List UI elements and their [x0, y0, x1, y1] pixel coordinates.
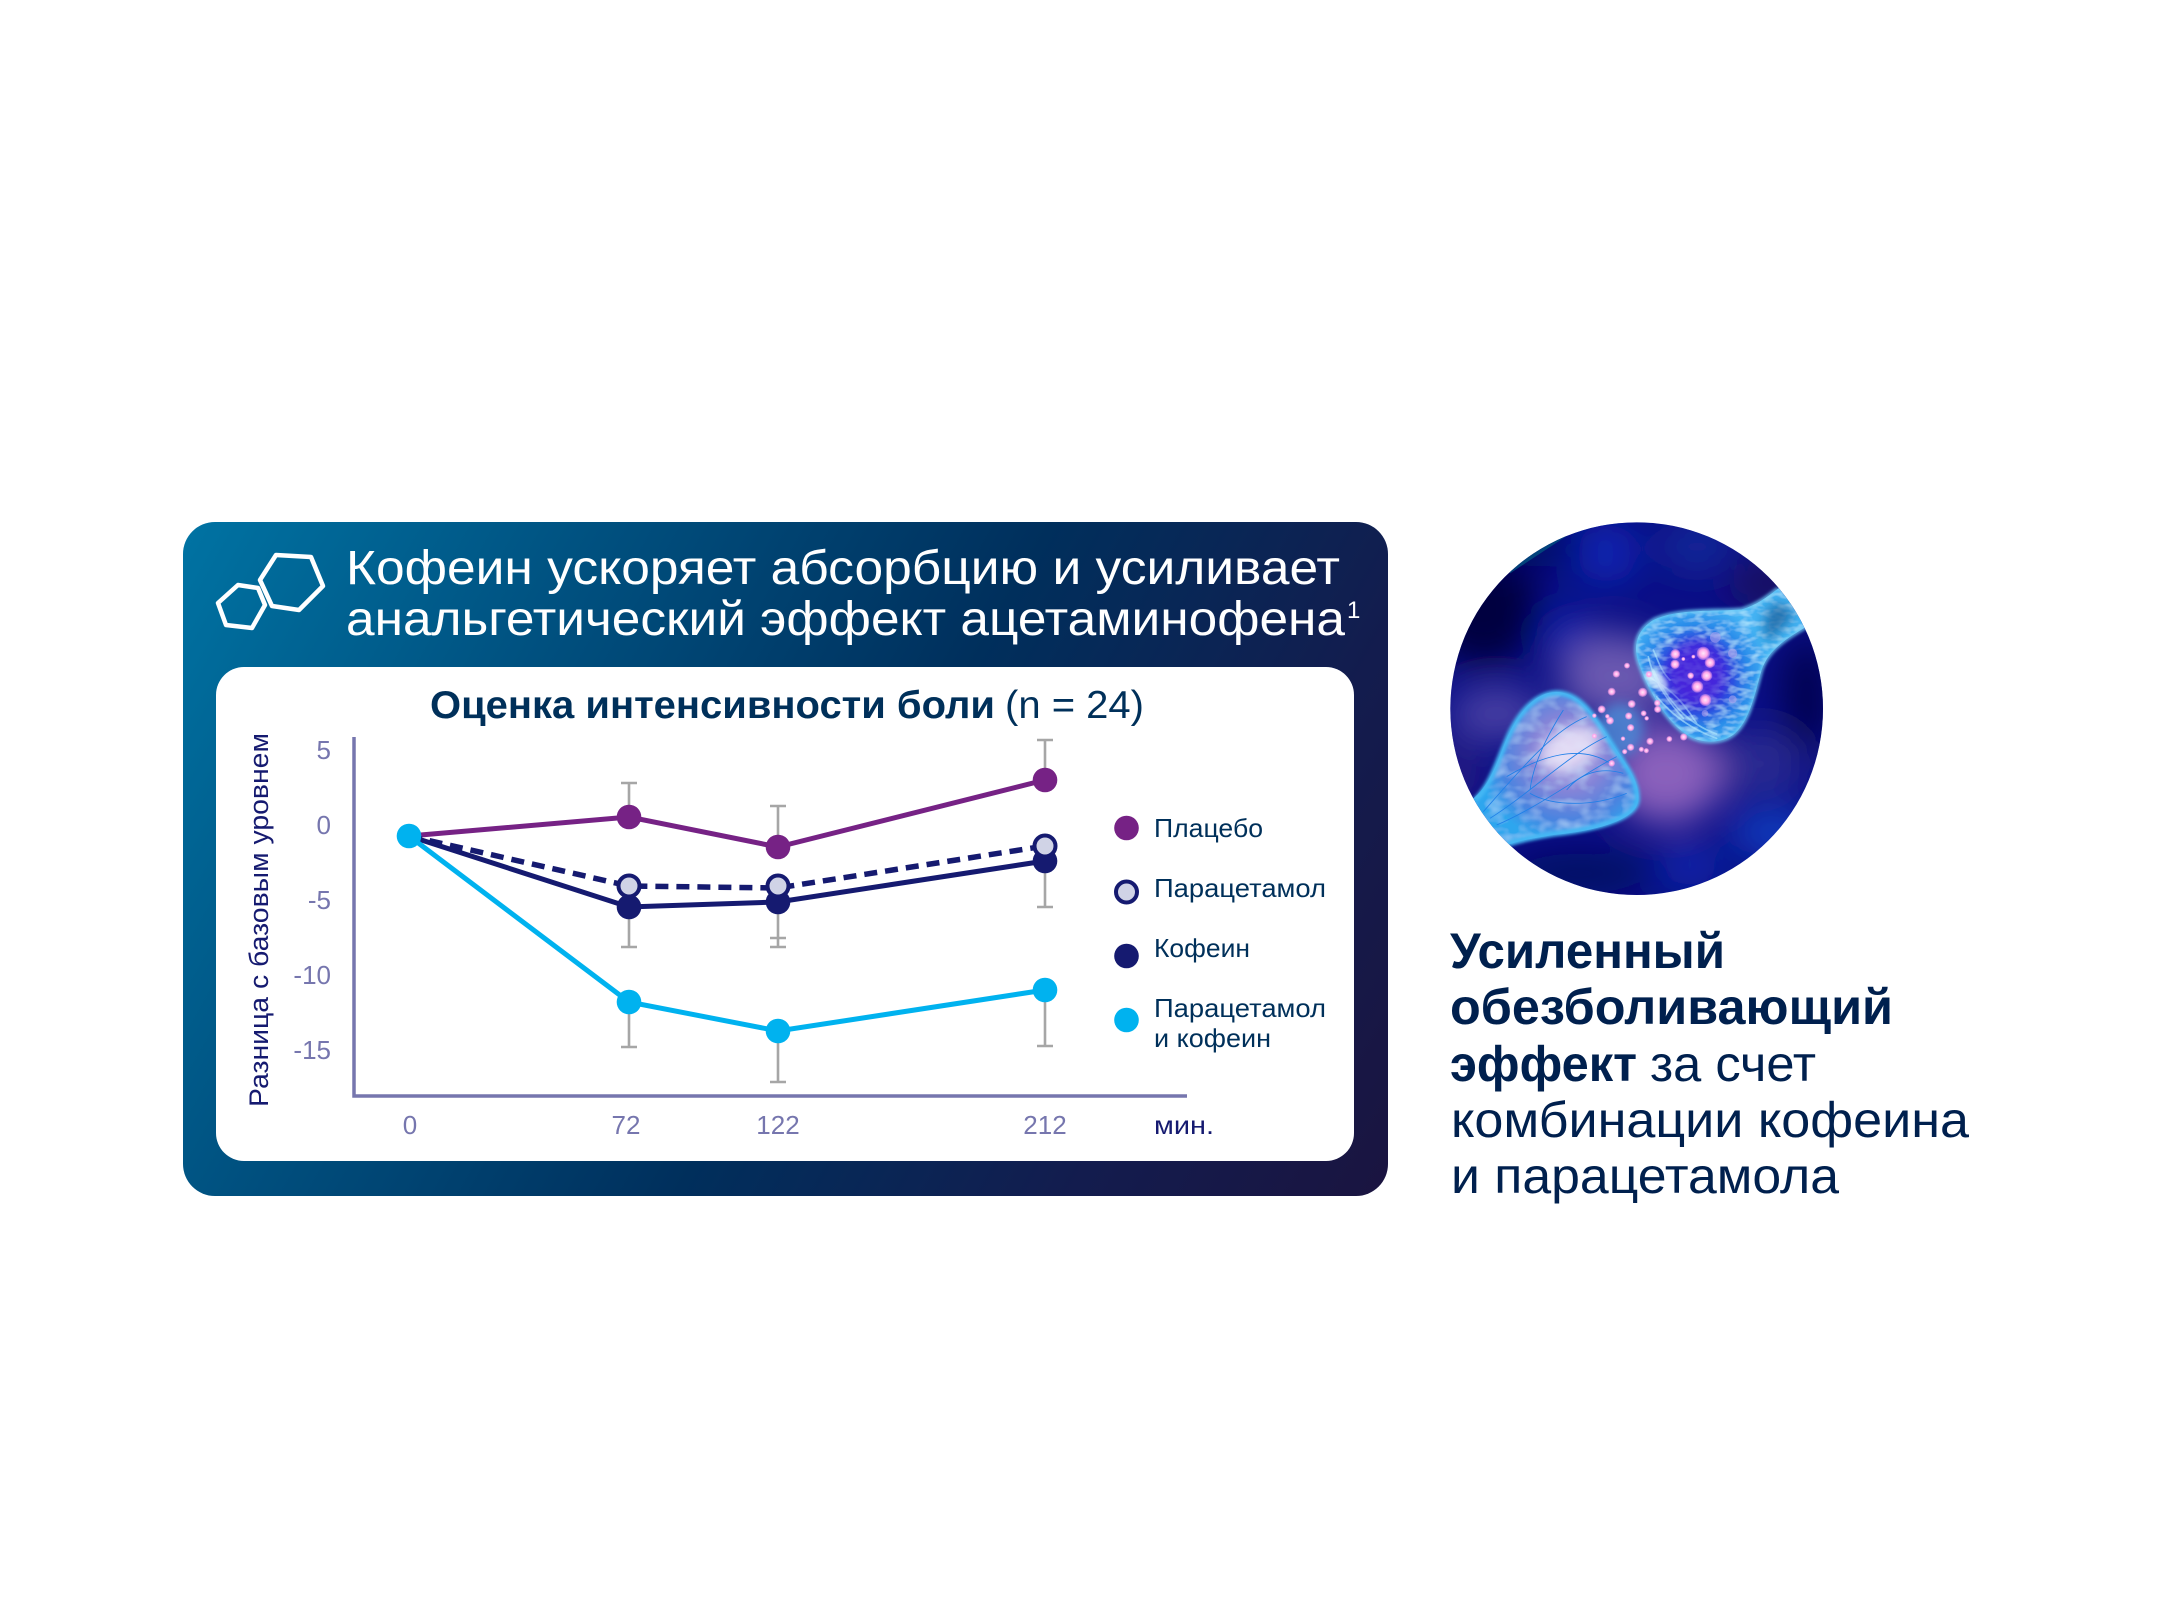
side text: и парацетамола: [1451, 1148, 1839, 1204]
icon: hexagons: [218, 555, 323, 628]
neuron: lower left: [1460, 692, 1638, 847]
panel heading: 1: [1347, 597, 1360, 624]
error bars: [621, 740, 1053, 1082]
line series: caffeine: [409, 836, 1045, 907]
legend: Парацетамол: [1154, 993, 1326, 1023]
legend: Кофеин: [1154, 933, 1250, 963]
x-axis labels: 0: [403, 1110, 417, 1140]
markers: caffeine: [617, 849, 1057, 919]
y-axis tick labels: 0: [317, 810, 331, 840]
panel heading: Кофеин ускоряет абсорбцию и усиливает: [346, 542, 1340, 595]
line series: placebo: [409, 780, 1045, 847]
neurotransmitter particles: [1592, 663, 1687, 767]
side text: Усиленный: [1450, 923, 1725, 979]
x-axis labels: 122: [756, 1110, 800, 1140]
legend: Плацебо: [1154, 813, 1263, 843]
legend: [1114, 813, 1326, 1053]
y-axis tick labels: [293, 735, 331, 1065]
markers: paracetamol: [618, 836, 1056, 896]
x-axis unit: мин.: [1154, 1110, 1214, 1140]
y-axis tick labels: -5: [308, 885, 331, 915]
x-axis labels: 212: [1023, 1110, 1067, 1140]
legend: и кофеин: [1154, 1023, 1271, 1053]
chart axes: [354, 737, 1187, 1096]
y-axis title: Разница с базовым уровнем: [244, 733, 274, 1107]
line series: paracetamol (dashed): [409, 836, 1045, 888]
side text: [1450, 923, 1969, 1204]
panel heading: анальгетический эффект ацетаминофена: [346, 593, 1345, 646]
side text: за счет: [1650, 1036, 1816, 1092]
chart title: Оценка интенсивности боли: [430, 684, 995, 727]
y-axis tick labels: -10: [293, 960, 331, 990]
x-axis labels: [403, 1110, 1067, 1140]
white chart card: [216, 667, 1354, 1161]
side text: эффект: [1450, 1036, 1637, 1092]
chart title: (n = 24): [1005, 684, 1144, 727]
image: synapse illustration: [1450, 522, 1823, 895]
side text: обезболивающий: [1450, 979, 1893, 1035]
y-axis tick labels: 5: [317, 735, 331, 765]
legend: Парацетамол: [1154, 873, 1326, 903]
y-axis tick labels: -15: [293, 1035, 331, 1065]
infographic canvas: [183, 522, 1969, 1204]
markers: placebo: [617, 768, 1057, 859]
panel heading: [346, 542, 1360, 646]
side text: комбинации кофеина: [1451, 1092, 1969, 1148]
line series: paracetamol and caffeine: [409, 836, 1045, 1031]
panel: caffeine chart card: [183, 522, 1388, 1196]
neuron: upper right: [1636, 577, 1823, 742]
x-axis labels: 72: [612, 1110, 640, 1140]
markers: paracetamol and caffeine: [397, 824, 1057, 1043]
